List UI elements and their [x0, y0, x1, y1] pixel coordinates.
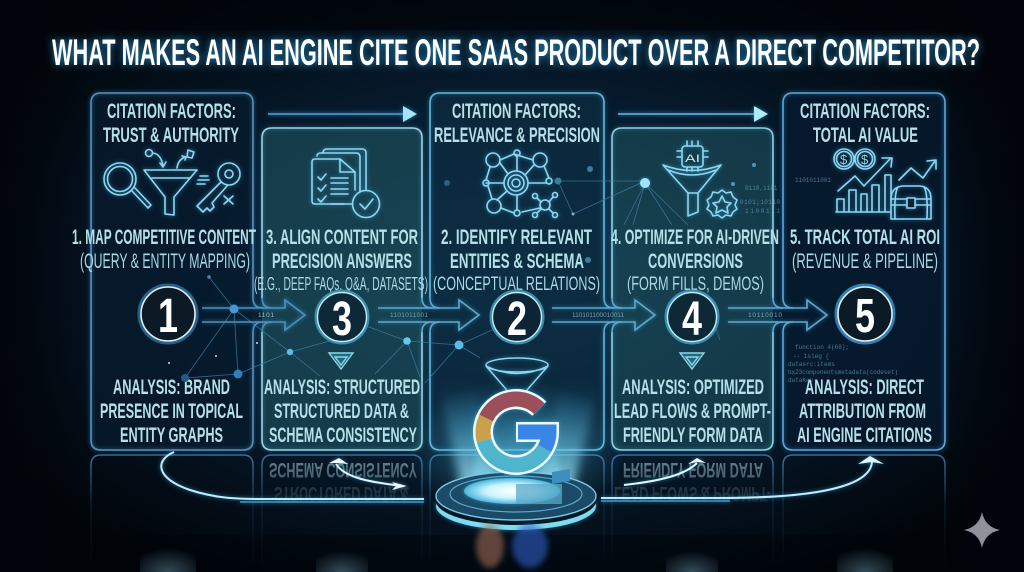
flow arrow: step 1 to step 3	[202, 298, 305, 332]
panel 3 step title: (E.G., DEEP FAQs, Q&A, DATASETS)	[254, 274, 428, 294]
floor reflection: FRIENDLY FORM DATA	[623, 458, 763, 481]
background code snippets: -- 1sleg {	[793, 353, 829, 360]
panel 2 heading	[434, 100, 600, 147]
background code snippets: 0110,1101	[745, 185, 778, 192]
panel 5 analysis	[797, 376, 932, 447]
logo reflection	[476, 524, 548, 568]
background code snippets: datasrc:items	[788, 361, 835, 368]
background code snippets: dataKey	[788, 377, 814, 384]
panel 3 step title: 3. ALIGN CONTENT FOR	[266, 226, 418, 249]
panel 3 analysis: ANALYSIS: STRUCTURED	[264, 376, 420, 399]
panel 3 analysis: STRUCTURED DATA &	[274, 400, 409, 423]
panel 3 step title: PRECISION ANSWERS	[272, 250, 412, 273]
icon: down triangle	[329, 353, 353, 369]
panel 4 analysis	[614, 376, 771, 447]
panel 1 analysis: PRESENCE IN TOPICAL	[100, 400, 243, 423]
panel 5 heading: CITATION FACTORS:	[800, 100, 930, 123]
step circle 1: 1	[158, 290, 178, 343]
icon: small funnel above the logo	[486, 358, 548, 398]
panel 5 step title	[790, 226, 940, 273]
panel 2 step title: ENTITIES & SCHEMA	[450, 250, 584, 273]
step circle 2: 2	[507, 293, 527, 346]
step circle 2	[491, 291, 543, 346]
panel 4 analysis: LEAD FLOWS & PROMPT-	[614, 400, 771, 423]
panel 1 step title	[72, 226, 256, 273]
panel 3 analysis	[264, 376, 420, 447]
curved arrow: below panel 4	[624, 458, 706, 485]
flow arrow: step 3 to step 2	[378, 298, 479, 332]
icon text: dollar signs	[840, 152, 869, 167]
panel 1 heading: TRUST & AUTHORITY	[103, 124, 239, 147]
icon: down triangle	[680, 353, 704, 369]
data network lines	[168, 163, 756, 383]
panel 2 step title: 2. IDENTIFY RELEVANT	[441, 226, 592, 249]
panel: step 5 total AI value	[783, 93, 945, 450]
icon: sparkle watermark	[964, 512, 1000, 548]
panel 1 heading: CITATION FACTORS:	[107, 100, 236, 123]
step circle 4	[666, 291, 718, 346]
background code snippets: function 4(68);	[795, 344, 849, 351]
background code snippets	[740, 177, 898, 384]
step circle 5: 5	[855, 290, 875, 343]
floor reflection	[90, 454, 946, 550]
panel 5 analysis: ANALYSIS: DIRECT	[805, 376, 924, 399]
icon: magnifier, funnel and key	[104, 150, 240, 215]
panel 4 analysis: FRIENDLY FORM DATA	[623, 424, 763, 447]
data bits on arrows: 10110010	[748, 312, 782, 319]
panel 2 step title: (CONCEPTUAL RELATIONS)	[433, 273, 600, 295]
panel 1 heading	[103, 100, 239, 147]
icon text: AI chip label: AI	[685, 153, 700, 165]
panel 5 heading: TOTAL AI VALUE	[813, 124, 918, 147]
step circle 3	[316, 291, 368, 346]
panel 5 step title: 5. TRACK TOTAL AI ROI	[790, 226, 940, 249]
panel: step 2 identify entities	[430, 93, 604, 450]
background code snippets: bx23componentsmetadata(codeset)	[788, 369, 898, 376]
background code snippets: 1100111	[745, 208, 780, 215]
panel 2 heading: CITATION FACTORS:	[452, 100, 581, 123]
panel 4 step title: CONVERSIONS	[648, 250, 743, 273]
panel 1 analysis: ENTITY GRAPHS	[120, 424, 223, 447]
curved arrow: platform to panel 5	[601, 456, 884, 501]
data bits on arrows: 110101100010011	[572, 312, 624, 319]
panel 5 analysis: ATTRIBUTION FROM	[799, 400, 926, 423]
hologram platform	[436, 469, 596, 530]
curved arrow: panel 1 to platform	[161, 452, 424, 502]
step circle 3: 3	[332, 293, 352, 346]
flow arrow: step 4 to step 5	[728, 298, 827, 332]
panel 4 step title	[611, 226, 779, 295]
background code snippets: 0101;10110	[740, 199, 780, 206]
panel 4 step title: 4. OPTIMIZE FOR AI-DRIVEN	[611, 226, 779, 249]
curved arrow: two-way below panel 3	[329, 458, 407, 490]
Google G logo	[483, 399, 549, 465]
panel 1 step title: 1. MAP COMPETITIVE CONTENT	[72, 226, 256, 249]
icon text: dollar signs: $	[861, 152, 869, 167]
top arrow: panel 2 to panel 5	[618, 106, 768, 122]
step circle 4: 4	[682, 293, 702, 346]
icon text: dollar signs: $	[840, 152, 848, 167]
panel 3 analysis: SCHEMA CONSISTENCY	[269, 424, 417, 447]
icon: checklist document	[312, 149, 380, 218]
step circle 1	[139, 285, 197, 343]
data bits on arrows: 1101	[258, 312, 274, 319]
panel 1 analysis: ANALYSIS: BRAND	[113, 376, 230, 399]
icon: coins, growth chart and treasure chest	[834, 149, 936, 219]
floor reflection: SCHEMA CONSISTENCY	[269, 458, 417, 481]
background code snippets: 1101011001	[795, 177, 831, 184]
panel 5 analysis: AI ENGINE CITATIONS	[797, 424, 932, 447]
panel 4 analysis: ANALYSIS: OPTIMIZED	[622, 376, 764, 399]
floor light streaks	[140, 538, 893, 572]
panel: step 4 optimize	[611, 128, 779, 450]
panel 1 analysis	[100, 376, 243, 447]
floor reflection: STRUCTURED DATA &	[274, 482, 409, 505]
icon: AI funnel and gear	[663, 141, 737, 218]
floor reflection: LEAD FLOWS & PROMPT-	[614, 482, 771, 505]
panel: step 1 trust and authority	[72, 93, 256, 450]
flow arrow: step 2 to step 4	[552, 298, 655, 332]
hologram: light cone	[406, 380, 626, 520]
top arrow: panel 1 to panel 2	[268, 106, 417, 122]
panel 2 heading: RELEVANCE & PRECISION	[434, 124, 600, 147]
data bits on arrows	[258, 312, 782, 319]
data bits on arrows: 1101011001	[390, 312, 428, 319]
icon: entity network	[483, 150, 558, 218]
panel 5 heading	[800, 100, 930, 147]
panel: step 3 align content	[254, 128, 428, 450]
panel 2 step title	[433, 226, 600, 295]
panel 1 step title: (QUERY & ENTITY MAPPING)	[80, 250, 250, 273]
panel 3 step title	[254, 226, 428, 294]
panel 5 step title: (REVENUE & PIPELINE)	[792, 250, 938, 273]
step circle 5	[836, 285, 894, 343]
panel 4 step title: (FORM FILLS, DEMOS)	[627, 273, 764, 295]
